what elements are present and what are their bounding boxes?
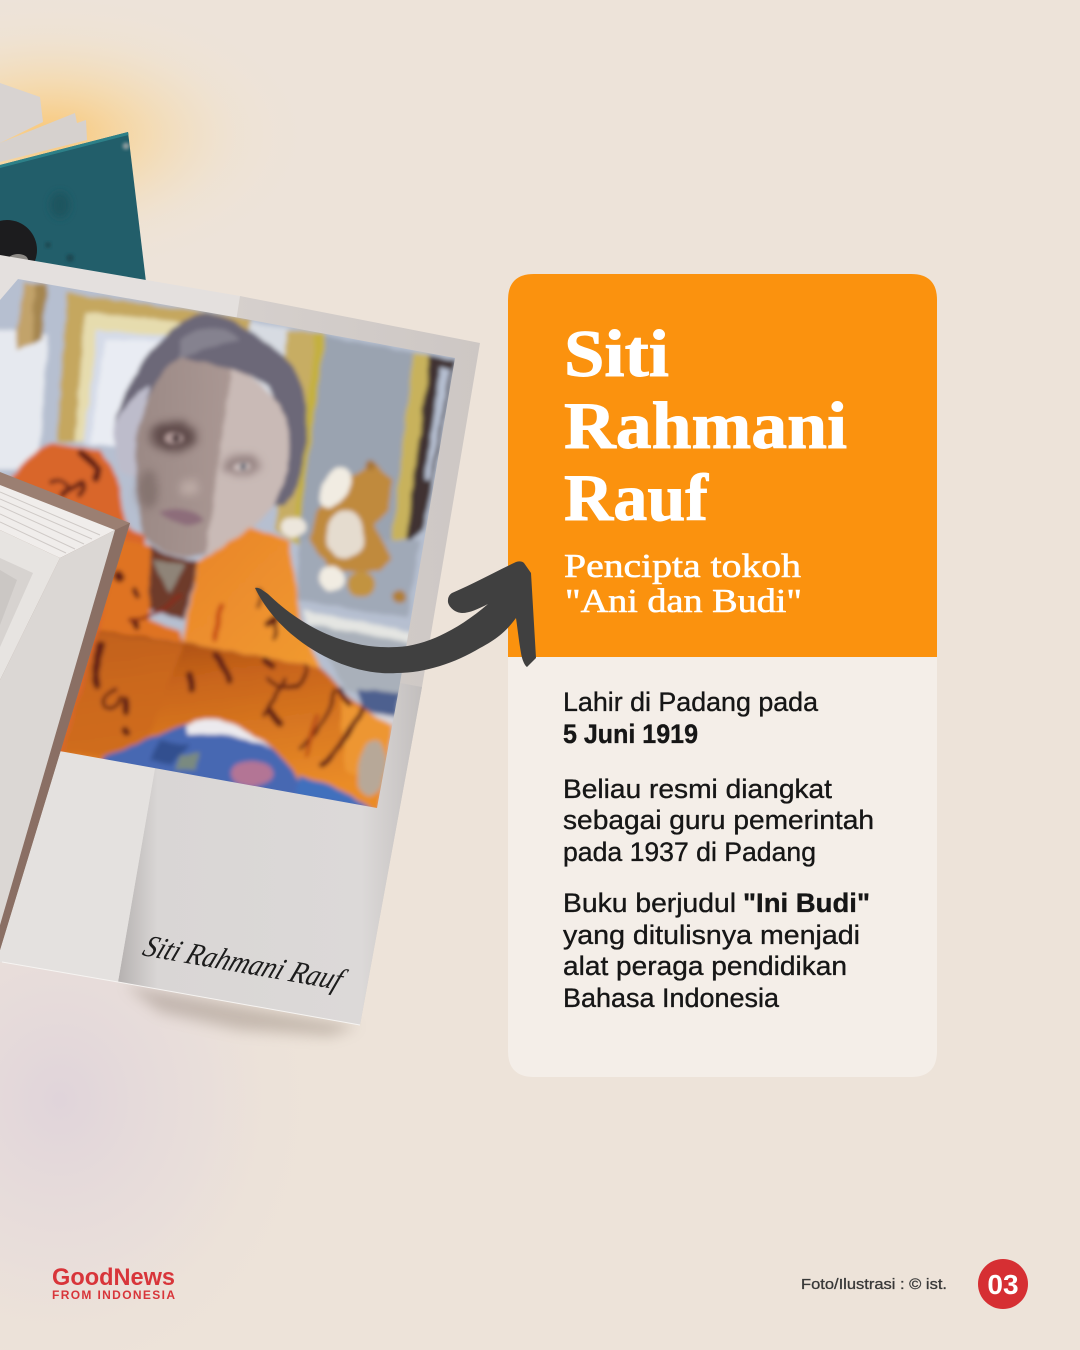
stack of books, top left [0,83,146,282]
text: book: Bahasa Indonesia [563,983,780,1013]
text: teacher: pada 1937 di Padang [563,837,816,867]
dress floral marks [50,452,362,765]
text: birth: Lahir di Padang pada [563,687,819,717]
teddy toy [281,460,407,604]
signature: Siti Rahmani Rauf [138,929,352,997]
text: teacher: sebagai guru pemerintah [563,805,874,835]
folded paper with photo [0,255,480,1025]
photo of Siti Rahmani Rauf [0,270,470,830]
photo credit: Foto/Ilustrasi : © ist. [801,1276,947,1293]
title: Siti [564,317,669,391]
page number badge [978,1259,1028,1309]
panel: profile card [508,274,937,1077]
face [135,358,289,557]
text: teacher [563,774,874,867]
text: book: yang ditulisnya menjadi [563,920,860,950]
logo: GoodNews from Indonesia: GoodNews [52,1264,175,1291]
subtitle: "Ani dan Budi" [565,583,802,620]
text: book: alat peraga pendidikan [563,951,847,981]
paper shadow [125,985,358,1036]
arrow [255,561,536,673]
text: book: "Ini Budi" [743,888,870,918]
paper panels [0,255,480,1025]
card body [508,640,937,1077]
card header [508,274,937,657]
text: book: Buku berjudul [563,888,736,918]
title [564,317,847,535]
subtitle: Pencipta tokoh [564,548,801,585]
page number badge: 03 [987,1269,1019,1300]
title: Rauf [564,461,709,535]
hair [113,313,307,505]
teal book cover [0,132,146,282]
open book, left [0,472,130,950]
title: Rahmani [564,389,847,463]
orange dress [0,443,392,812]
logo: GoodNews from Indonesia: FROM INDONESIA [52,1288,175,1302]
text: book [563,888,870,1013]
subtitle [564,548,802,620]
photo background [0,270,470,830]
blue cloth [100,719,391,812]
text: birth [563,687,819,749]
text: birth: 5 Juni 1919 [563,719,698,749]
text: teacher: Beliau resmi diangkat [563,774,833,804]
